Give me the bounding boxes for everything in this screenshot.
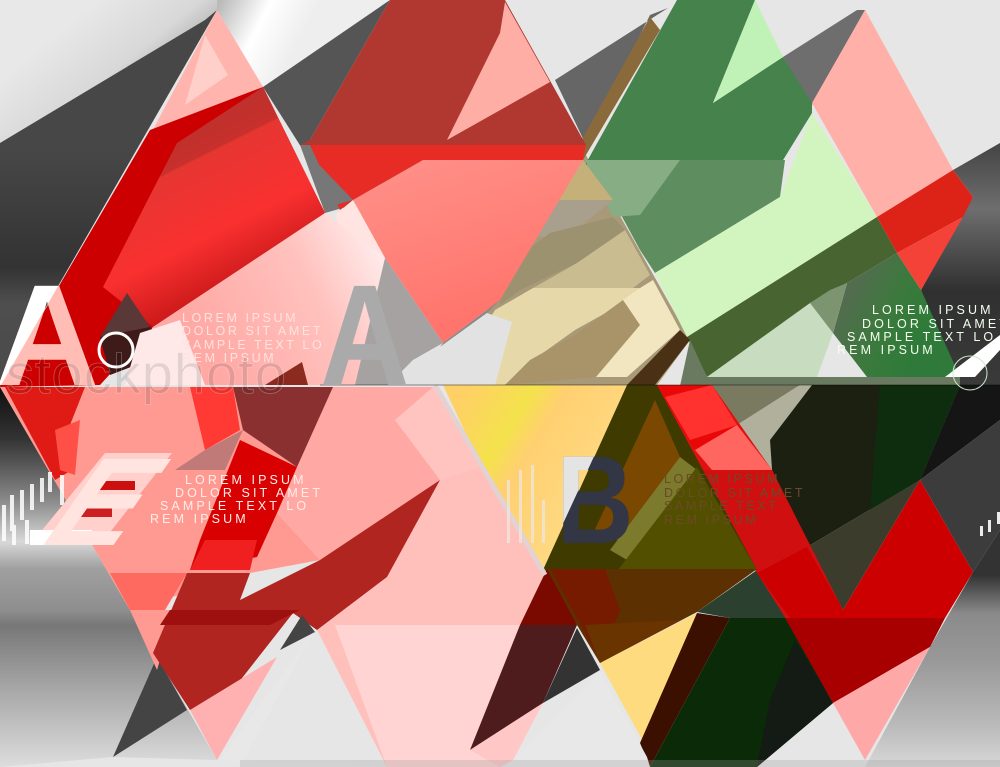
panel: orange diamond	[443, 17, 757, 767]
bars: yellow barcode centre	[507, 465, 545, 543]
letter E skewed: E	[16, 432, 197, 572]
bars: right barcode	[980, 512, 1000, 536]
text block: left bottom: DOLOR SIT AMET	[175, 486, 323, 500]
text block: B panel: DOLOR SIT AMET	[664, 486, 805, 500]
panel: pink and red ribbon	[657, 10, 973, 760]
letter A grey: A	[320, 255, 409, 416]
panel: green diamond	[585, 0, 960, 767]
bars: grey barcode left	[2, 472, 64, 545]
text block: B panel: REM IPSUM	[664, 513, 758, 527]
text block: left bottom: SAMPLE TEXT LO	[160, 499, 309, 513]
letter B: B	[556, 429, 634, 570]
glyph fragment right	[945, 335, 1000, 377]
text block: B panel: SAMPLE TEXT	[664, 499, 779, 513]
text block: left top: REM IPSUM	[182, 351, 276, 365]
text block: left top: SAMPLE TEXT LO	[182, 338, 324, 352]
text block: right	[837, 303, 1000, 357]
text block: left top: DOLOR SIT AMET	[182, 324, 323, 338]
panel: orange base	[443, 150, 690, 385]
text block: left bottom: REM IPSUM	[150, 512, 249, 526]
letter B	[563, 456, 629, 543]
text block: left bottom: LOREM IPSUM	[185, 473, 307, 487]
text block: B panel: LOREM IPSUM	[664, 472, 780, 486]
text block: left top: LOREM IPSUM	[182, 311, 298, 325]
text block: B panel	[664, 472, 805, 527]
letter A white	[0, 286, 96, 385]
panel: left red diamond	[0, 10, 440, 767]
horizontal band line	[320, 384, 1000, 386]
watermark	[6, 333, 987, 405]
text block: left top	[182, 311, 324, 365]
watermark: stockphoto	[6, 342, 287, 405]
text block: right: LOREM IPSUM	[872, 303, 994, 317]
text block: left bottom	[150, 473, 323, 526]
letter B: B	[556, 429, 634, 570]
text block: right: REM IPSUM	[837, 343, 936, 357]
panel: centre red diamond	[277, 0, 650, 767]
dotted bottom strip	[240, 760, 1000, 767]
text block: right: SAMPLE TEXT LO	[847, 330, 996, 344]
